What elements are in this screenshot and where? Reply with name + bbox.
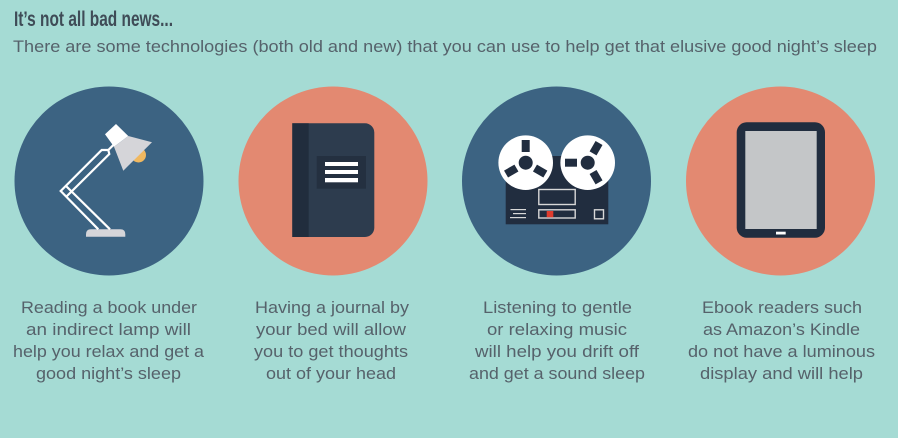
caption: lamp: help you relax and get a <box>13 342 205 361</box>
circle: ebook background <box>686 86 875 276</box>
caption: tape <box>469 298 645 383</box>
icon: tablet <box>737 122 825 238</box>
circle: lamp background <box>14 86 204 276</box>
icon: reel-to-reel tape player <box>498 135 615 224</box>
caption: journal: your bed will allow <box>256 320 407 339</box>
caption: tape: or relaxing music <box>487 320 628 339</box>
caption: tape: and get a sound sleep <box>469 364 645 383</box>
caption: ebook: Ebook readers such <box>702 298 862 317</box>
caption: ebook: as Amazon’s Kindle <box>703 320 860 339</box>
caption: ebook <box>688 298 875 383</box>
icon: journal <box>292 123 374 237</box>
caption: journal: Having a journal by <box>255 298 410 317</box>
circle: tape background <box>462 86 651 276</box>
circle: journal background <box>238 86 428 276</box>
title: It’s not all bad news... <box>14 8 173 31</box>
caption: journal <box>254 298 410 383</box>
icon: desk lamp <box>61 124 152 237</box>
caption: lamp: an indirect lamp will <box>26 320 191 339</box>
caption: tape: Listening to gentle <box>483 298 632 317</box>
panel: lamp <box>13 86 205 383</box>
panel: ebook reader <box>686 86 875 383</box>
caption: lamp: Reading a book under <box>21 298 197 317</box>
caption: lamp <box>13 298 205 383</box>
caption: journal: out of your head <box>266 364 396 383</box>
caption: journal: you to get thoughts <box>254 342 408 361</box>
caption: tape: will help you drift off <box>474 342 639 361</box>
subtitle: There are some technologies (both old and new) that you can use to help get that elusive good night’s sleep <box>13 37 877 56</box>
caption: ebook: display and will help <box>700 364 863 383</box>
caption: lamp: good night’s sleep <box>36 364 181 383</box>
panel: journal <box>238 86 428 383</box>
panel: reel-to-reel <box>462 86 651 383</box>
caption: ebook: do not have a luminous <box>688 342 875 361</box>
